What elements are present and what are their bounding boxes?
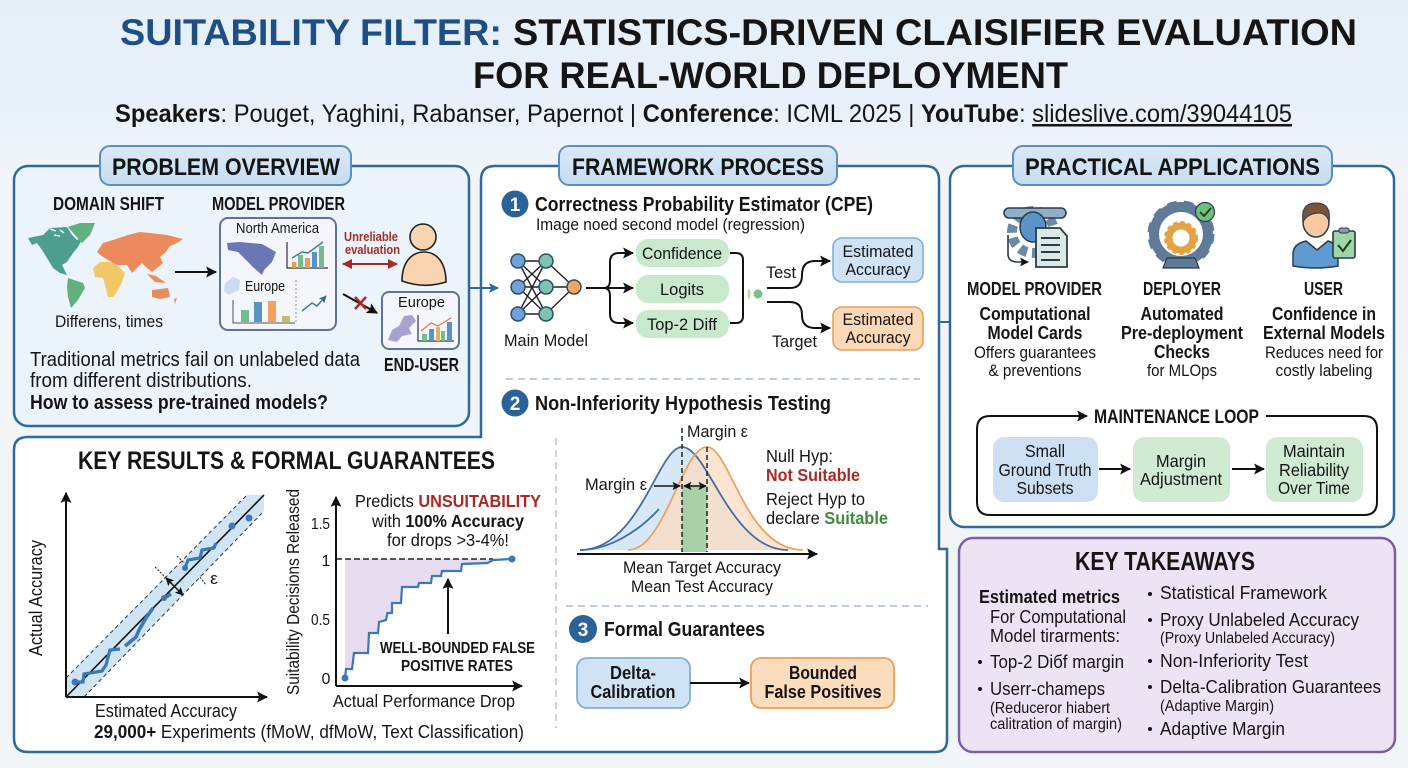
label: domain shift: DOMAIN SHIFT: [53, 194, 164, 214]
box: delta-calibration: Calibration: [590, 682, 676, 702]
step: margin adjustment: Adjustment: [1140, 469, 1222, 489]
column: user: Confidence in: [1272, 304, 1376, 324]
badge: step 3: 3: [578, 620, 588, 641]
output: estimated accuracy target: [833, 307, 923, 350]
axis labels: mean accuracy: [623, 558, 781, 596]
list: estimated metrics: Model tirarments:: [990, 626, 1120, 646]
step: maintain reliability: Over Time: [1278, 478, 1350, 498]
feature: confidence: Confidence: [642, 244, 722, 263]
subtitle: speakers, conference and link: Speakers: Pouget, Yaghini, Rabanser, Papernot | Conference: ICML 2025 | YouTube: slideslive.com/39044105: [115, 100, 1292, 128]
text block: problem statement: Traditional metrics fail on unlabeled data: [30, 348, 361, 371]
section 1: correctness probability estimator: [502, 190, 923, 351]
title: FOR REAL-WORLD DEPLOYMENT: [473, 55, 1068, 96]
callout: unsuitability accuracy: with 100% Accuracy: [371, 511, 524, 531]
heading: practical applications: PRACTICAL APPLICATIONS: [1025, 154, 1320, 181]
feature: logits: Logits: [660, 280, 704, 299]
callout: unreliable evaluation: evaluation: [345, 243, 400, 257]
arrow: target path: [767, 302, 830, 328]
axis labels: mean accuracy: Mean Target Accuracy: [623, 558, 781, 577]
output: estimated accuracy test: Estimated: [842, 242, 914, 261]
card: end user region: Europe: [398, 294, 445, 311]
text block: null hypothesis: declare Suitable: [766, 508, 888, 528]
icon: deployer gear and check: [1151, 202, 1214, 268]
callout: unsuitability accuracy: for drops >3-4%!: [387, 530, 509, 550]
column: model provider: Model Cards: [988, 323, 1082, 343]
step: small ground truth subsets: Small: [1025, 441, 1065, 461]
column: user: costly labeling: [1276, 362, 1372, 380]
chart: suitability decisions vs performance drop: 0: [322, 671, 331, 688]
heading: problem overview: [100, 146, 351, 185]
list: framework takeaways: (Adaptive Margin): [1160, 698, 1274, 715]
arrow: framework to applications: [939, 321, 967, 323]
feature: logits: [636, 275, 729, 303]
list: framework takeaways: Proxy Unlabeled Accuracy: [1160, 610, 1359, 630]
section: key results and formal guarantees: [26, 447, 541, 742]
chart: overlapping bell curves: Margin ε: [687, 422, 748, 441]
title: [120, 12, 1357, 96]
list: estimated metrics: Userr-chameps: [990, 679, 1105, 699]
arrows: model to features: [586, 253, 633, 323]
list: estimated metrics: Top-2 Diбf margin: [990, 652, 1124, 672]
chart: suitability decisions vs performance drop: 1: [322, 553, 331, 570]
panel: problem overview: [14, 146, 469, 426]
step: maintain reliability: Maintain: [1283, 441, 1345, 461]
arrow: test path: [767, 261, 830, 288]
column: model provider: & preventions: [988, 362, 1082, 380]
text block: problem statement: from different distributions.: [30, 369, 252, 392]
heading: key results: KEY RESULTS & FORMAL GUARANTEES: [78, 447, 495, 475]
output: estimated accuracy target: Estimated: [842, 310, 914, 329]
panel: practical applications: [950, 146, 1394, 527]
arrow: map to model provider: [175, 271, 216, 273]
output: estimated accuracy test: [833, 238, 923, 282]
chart: suitability decisions vs performance drop: Actual Performance Drop: [333, 691, 515, 711]
icon: neural network main model: [511, 254, 581, 321]
step: margin adjustment: [1133, 437, 1230, 502]
arrow: blocked path to end user: [343, 294, 377, 313]
chart: overlapping bell curves: [577, 422, 817, 554]
label: end-user: END-USER: [384, 355, 459, 375]
heading: practical applications: [1013, 146, 1332, 185]
badge: step 2: [502, 390, 528, 416]
chart: overlapping bell curves: Margin ε: [585, 475, 647, 494]
diagram: maintenance loop: [977, 407, 1377, 515]
callout: unsuitability accuracy: [355, 491, 541, 550]
list: estimated metrics: calitration of margin): [990, 716, 1122, 733]
list: framework takeaways: Delta-Calibration Guarantees: [1160, 677, 1381, 697]
column: deployer: [1121, 279, 1243, 380]
icon: world map: [28, 223, 183, 308]
feature: top-2 diff: Top-2 Diff: [647, 315, 717, 334]
list: estimated metrics: Estimated metrics: [979, 587, 1120, 607]
column: user: [1263, 279, 1385, 380]
title: STATISTICS-DRIVEN CLAISIFIER EVALUATION: [513, 12, 1357, 53]
icon: end user person: [402, 224, 446, 285]
callout: well-bounded false positive rates: [380, 640, 535, 675]
feature: top-2 diff: [636, 310, 729, 338]
step: maintain reliability: Reliability: [1279, 460, 1349, 480]
box: delta-calibration: [577, 658, 690, 708]
list: framework takeaways: Adaptive Margin: [1160, 719, 1285, 739]
list: framework takeaways: [1148, 583, 1381, 739]
list: framework takeaways: (Proxy Unlabeled Accuracy): [1160, 630, 1335, 647]
chart: suitability decisions vs performance drop: Suitability Decisions Released: [283, 489, 303, 695]
axis labels: mean accuracy: Mean Test Accuracy: [631, 577, 773, 596]
column: user: External Models: [1263, 323, 1385, 343]
text block: null hypothesis: Not Suitable: [766, 465, 860, 485]
badge: step 3: [569, 615, 597, 643]
callout: well-bounded false positive rates: WELL-BOUNDED FALSE: [380, 640, 535, 657]
text block: null hypothesis: [766, 446, 888, 528]
box: bounded false positives: [751, 658, 894, 708]
chart: suitability decisions vs performance drop: 0.5: [311, 612, 330, 629]
section 3: formal guarantees: [569, 615, 894, 708]
box: bounded false positives: Bounded: [789, 663, 857, 683]
diagram: maintenance loop: MAINTENANCE LOOP: [1094, 407, 1259, 428]
text block: problem statement: [30, 348, 361, 414]
column: model provider: Computational: [980, 304, 1090, 324]
card: model provider regions: North America: [236, 220, 320, 237]
heading: framework process: FRAMEWORK PROCESS: [572, 154, 824, 181]
label: test: Test: [766, 264, 796, 282]
callout: unsuitability accuracy: Predicts UNSUITABILITY: [355, 491, 541, 511]
callout: unreliable evaluation: [343, 230, 400, 264]
column: deployer: Pre-deployment: [1121, 323, 1243, 343]
section 2: non-inferiority hypothesis testing: [502, 390, 888, 596]
column: deployer: DEPLOYER: [1143, 279, 1221, 299]
box: bounded false positives: False Positives: [764, 682, 882, 702]
chart: suitability decisions vs performance drop: [283, 489, 522, 711]
text block: problem statement: How to assess pre-trained models?: [30, 391, 328, 414]
card: end user region: [382, 292, 459, 349]
badge: step 2: 2: [510, 394, 520, 415]
output: estimated accuracy test: Accuracy: [846, 260, 911, 279]
list: framework takeaways: Statistical Framework: [1160, 583, 1328, 603]
badge: step 1: [502, 190, 528, 218]
list: estimated metrics: [978, 587, 1126, 733]
arrow: delta to bounded: [690, 682, 749, 684]
badge: step 1: 1: [510, 195, 521, 216]
heading: problem overview: PROBLEM OVERVIEW: [112, 154, 340, 181]
feature: confidence: [636, 239, 729, 267]
heading: key takeaways: KEY TAKEAWAYS: [1075, 548, 1255, 576]
text block: null hypothesis: Null Hyp:: [766, 446, 833, 466]
text block: null hypothesis: Reject Hyp to: [766, 489, 865, 509]
arrow: problem to framework: [469, 287, 498, 289]
step: small ground truth subsets: Subsets: [1016, 478, 1074, 498]
output: estimated accuracy target: Accuracy: [846, 328, 911, 347]
column: model provider: MODEL PROVIDER: [967, 279, 1102, 299]
list: estimated metrics: (Reduceror hiabert: [990, 700, 1111, 717]
label: model provider: MODEL PROVIDER: [212, 194, 345, 214]
subheading: cpe: Image noed second model (regression): [536, 216, 805, 234]
chart: suitability decisions vs performance drop: 1.5: [311, 516, 330, 533]
panel: key takeaways: [959, 538, 1395, 752]
callout: well-bounded false positive rates: POSITIVE RATES: [401, 658, 513, 675]
chart: estimated vs actual accuracy: [26, 493, 267, 721]
icon: user with clipboard: [1293, 203, 1355, 268]
heading: hypothesis testing: Non-Inferiority Hypothesis Testing: [535, 393, 831, 415]
column: deployer: Automated: [1140, 304, 1224, 324]
column: deployer: Checks: [1154, 342, 1210, 362]
heading: formal guarantees: Formal Guarantees: [604, 619, 765, 641]
column: user: Reduces need for: [1265, 344, 1383, 362]
arrow: subsets to margin: [1099, 468, 1130, 470]
chart: estimated vs actual accuracy: Estimated Accuracy: [95, 701, 237, 721]
step: margin adjustment: Margin: [1156, 451, 1206, 471]
chart: estimated vs actual accuracy: Actual Accuracy: [26, 540, 46, 656]
list: estimated metrics: For Computational: [990, 607, 1126, 627]
label: main model: Main Model: [504, 332, 588, 350]
arrow: margin to reliability: [1232, 468, 1264, 470]
panel: framework process and key results outline: [14, 166, 947, 752]
title: SUITABILITY FILTER:: [120, 12, 502, 53]
caption: world map: Differens, times: [55, 312, 163, 331]
card: model provider regions: Europe: [245, 278, 285, 295]
bracket: features merge: [730, 253, 743, 323]
text: experiments note: 29,000+ Experiments (fMoW, dfMoW, Text Classification): [94, 722, 524, 742]
label: target: Target: [772, 333, 817, 351]
icon: model provider gear and document: [1004, 208, 1067, 267]
step: small ground truth subsets: Ground Truth: [998, 460, 1092, 480]
heading: cpe: Correctness Probability Estimator (CPE): [535, 194, 873, 216]
heading: framework process: [559, 146, 837, 185]
column: user: USER: [1304, 279, 1343, 299]
callout: unreliable evaluation: Unreliable: [344, 230, 398, 244]
column: model provider: Offers guarantees: [974, 344, 1096, 362]
step: maintain reliability: [1266, 437, 1363, 502]
step: small ground truth subsets: [993, 437, 1098, 502]
column: deployer: for MLOps: [1147, 362, 1217, 380]
icon: small green mark: [748, 289, 762, 299]
card: model provider regions: [220, 218, 336, 330]
list: framework takeaways: Non-Inferiority Test: [1160, 651, 1308, 671]
column: model provider: [967, 279, 1102, 380]
chart: estimated vs actual accuracy: ε: [210, 569, 218, 588]
box: delta-calibration: Delta-: [610, 663, 656, 683]
